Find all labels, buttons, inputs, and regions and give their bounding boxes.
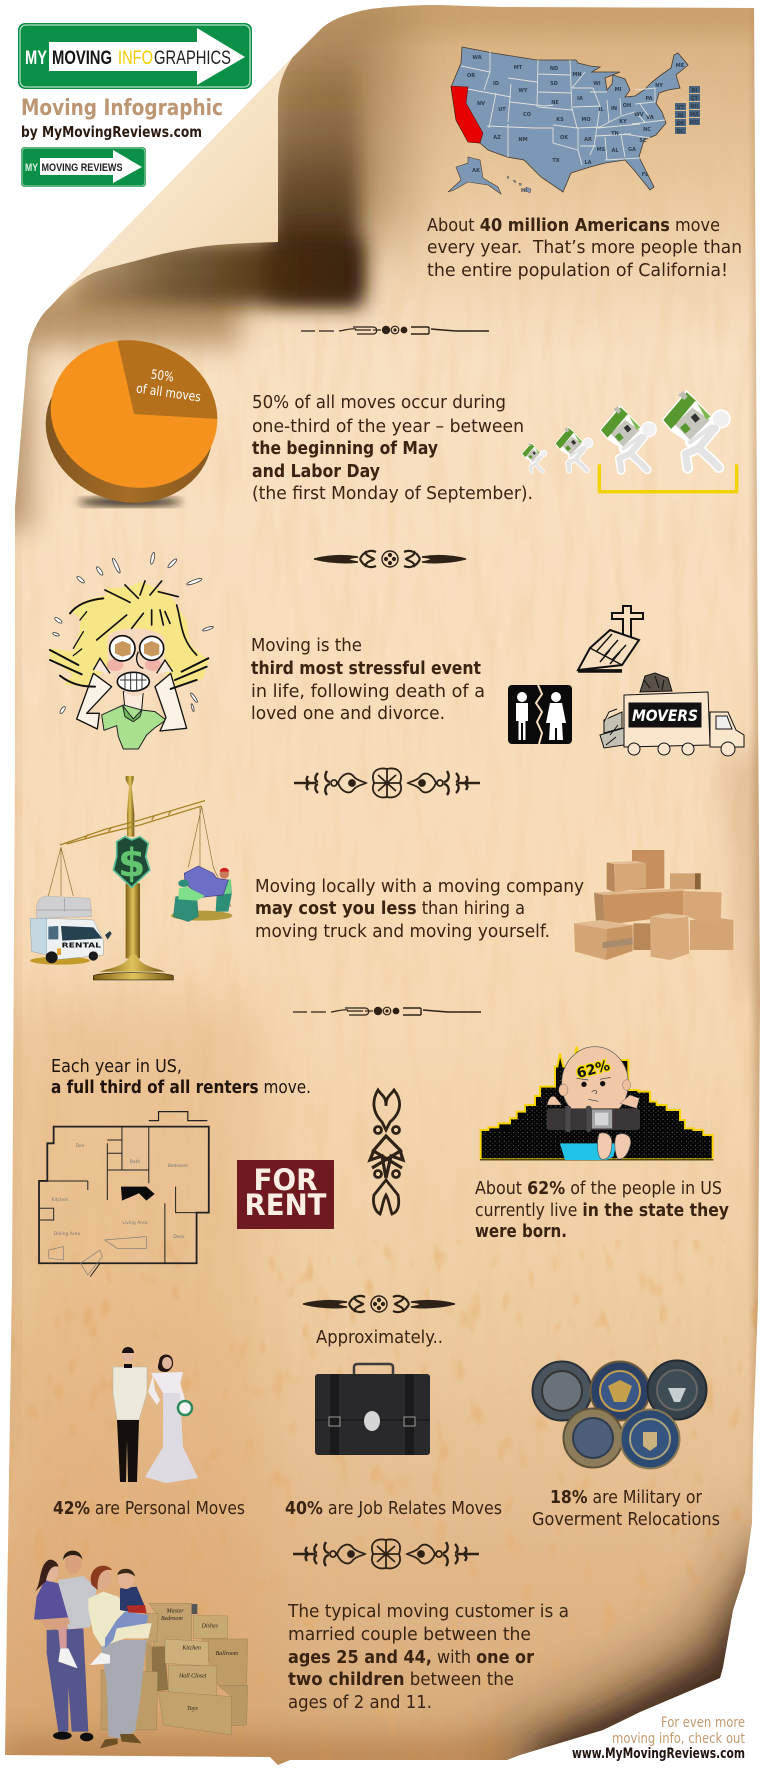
state labels: ME [676, 63, 685, 69]
state labels: AK [472, 168, 481, 174]
illustration: cardboard boxes [574, 850, 733, 960]
illustration: military seals [532, 1360, 706, 1468]
text: moving locally: moving truck and moving yourself. [255, 921, 550, 942]
state labels: VT [677, 105, 685, 111]
text: 50% of all moves: 50% of all moves occur during [252, 392, 506, 413]
sign: for rent: FOR [254, 1163, 318, 1197]
state labels: NE [551, 100, 559, 106]
yellow bracket [599, 464, 737, 492]
state labels: NV [477, 101, 485, 107]
boy [105, 1612, 148, 1648]
byline: by MyMovingReviews.com [21, 123, 202, 141]
text: renters: a full third of all renters move. [51, 1077, 311, 1098]
text: typical moving customer [287, 1601, 569, 1713]
text: 50% of all moves: (the first Monday of September). [252, 483, 533, 504]
state labels: SC [639, 138, 647, 144]
Hawaii [507, 176, 531, 193]
state labels: KS [556, 117, 564, 123]
text: 50% of all moves: and Labor Day [252, 461, 380, 482]
rental truck [30, 957, 90, 965]
text: 50% of all moves: the beginning of May [252, 438, 438, 459]
text: third most stressful event: Moving is the [251, 635, 362, 656]
dollar badge [113, 837, 150, 887]
illustration: baby in seat belt with city skyline [480, 1047, 713, 1160]
text: 50% of all moves: one-third of the year – between [252, 416, 524, 437]
boxes: Kitchen [181, 1645, 201, 1651]
man [47, 1628, 88, 1732]
state labels: MI [615, 87, 622, 93]
icon: movers truck: MOVERS [632, 706, 698, 725]
state labels: VA [646, 115, 654, 121]
state labels: IL [598, 107, 604, 113]
illustration: balance scale [30, 776, 232, 980]
chart: 3D pie 50% of all moves [46, 340, 218, 508]
logo: My Moving Infographics sign: MY [25, 48, 47, 69]
logo: My Moving Infographics sign [18, 23, 252, 89]
state labels: MN [572, 72, 582, 78]
Alaska [448, 157, 501, 194]
state labels: DE [677, 121, 685, 127]
state labels: AL [611, 148, 619, 154]
boxes [101, 1603, 248, 1735]
icon: movers truck [600, 673, 744, 756]
state labels: UT [498, 107, 506, 113]
logo: My Moving Infographics sign: GRAPHICS [154, 48, 231, 69]
state labels: WA [472, 55, 482, 61]
62% label: 62% [575, 1058, 612, 1082]
text: typical moving customer: married couple between the [288, 1624, 531, 1645]
state labels: NM [518, 137, 528, 143]
state labels: MA [690, 112, 699, 118]
state labels: OK [560, 135, 569, 141]
text: live in state born [475, 1178, 729, 1242]
state labels: NJ [677, 113, 684, 119]
boxes: Ballroom [216, 1651, 239, 1657]
room labels: Living Area [122, 1220, 148, 1226]
text: third most stressful event: in life, following death of a [251, 681, 485, 702]
text: renters: Each year in US, [51, 1056, 182, 1077]
text: 40 million Americans: the entire population of California! [427, 260, 728, 281]
text: moving locally [255, 876, 584, 942]
state labels: HI [521, 188, 527, 194]
text: live in state born: About 62% of the people in US [475, 1178, 722, 1199]
state labels: AR [584, 137, 592, 143]
pie label: 50% [150, 368, 175, 386]
state labels: WY [518, 88, 528, 94]
sign: for rent [237, 1160, 334, 1229]
illustration: family with moving boxes [34, 1551, 248, 1748]
text: third most stressful event: third most stressful event [251, 658, 481, 679]
text: footer call to action: For even more [661, 1715, 745, 1731]
text: move type percentages: Goverment Relocations [532, 1509, 720, 1530]
boxes: Hall Closet [178, 1673, 207, 1679]
state labels: MS [597, 147, 606, 153]
illustration: balance scale: RENTAL [62, 942, 102, 950]
state labels: CO [523, 112, 531, 118]
state labels: WV [634, 112, 644, 118]
text: move type percentages: 40% are Job Relates Moves [285, 1498, 502, 1519]
illustration: wedding couple [113, 1347, 198, 1483]
state labels: LA [584, 160, 592, 166]
map: USA with California highlighted [448, 47, 700, 194]
room labels: Deck [173, 1234, 185, 1240]
illustration: floor plan [39, 1112, 209, 1277]
boxes: Bedroom [161, 1616, 183, 1622]
state labels: WI [593, 81, 601, 87]
curl flap [63, 57, 293, 293]
beam [60, 801, 205, 845]
state labels: TX [552, 158, 560, 164]
state labels: MO [581, 117, 591, 123]
illustration: stressed woman [50, 552, 214, 749]
text: move type percentages: 42% are Personal Moves [53, 1498, 245, 1519]
state labels: GA [628, 147, 636, 153]
logo: My Moving Reviews sign [21, 147, 146, 187]
state labels: MT [514, 65, 523, 71]
logo: My Moving Reviews sign: MY [25, 162, 39, 174]
room labels: Bath [130, 1159, 140, 1165]
state labels: MD [690, 120, 699, 126]
icon: figures carrying houses [522, 391, 737, 492]
state labels: NY [655, 83, 663, 89]
logo: My Moving Infographics sign: MOVING [52, 48, 112, 69]
pie label: of all moves [135, 382, 202, 406]
state labels: SD [550, 81, 558, 87]
state labels: KY [619, 119, 627, 125]
state labels: RI [692, 88, 697, 94]
state labels: NC [643, 127, 651, 133]
state labels: IN [611, 106, 617, 112]
text: 40 million Americans [427, 215, 742, 281]
state labels: OH [623, 103, 631, 109]
state labels: IA [577, 96, 583, 102]
state boxes [675, 86, 700, 134]
state labels: ND [550, 66, 558, 72]
state labels: ID [493, 81, 499, 87]
text: 40 million Americans: About 40 million Americans move [427, 215, 720, 236]
heading: Moving Infographic: Moving Infographic [21, 96, 223, 121]
couch [37, 896, 92, 918]
text: 40 million Americans: every year. That’s more people than [427, 237, 742, 258]
room labels: Kitchen [52, 1197, 69, 1203]
text: footer call to action [572, 1715, 745, 1762]
text: typical moving customer: ages of 2 and 11. [288, 1692, 432, 1713]
state labels: NH [690, 104, 699, 110]
curl shadow [270, 0, 400, 240]
text: third most stressful event: loved one and divorce. [251, 703, 445, 724]
text: typical moving customer: ages 25 and 44, with one or [288, 1647, 534, 1668]
state labels: PA [645, 96, 653, 102]
text: typical moving customer: two children between the [288, 1669, 514, 1690]
room labels: Den [75, 1143, 85, 1149]
state labels: OR [467, 73, 475, 79]
girl [42, 1616, 67, 1648]
text: move type percentages [53, 1487, 720, 1530]
text: live in state born: were born. [475, 1221, 567, 1242]
text: live in state born: currently live in the state they [475, 1200, 729, 1221]
logo: My Moving Infographics sign: INFO [118, 48, 153, 69]
logo: My Moving Reviews sign: MOVING REVIEWS [42, 162, 122, 174]
room labels [52, 1143, 188, 1240]
room labels: Bedroom [168, 1163, 188, 1169]
pie label [135, 368, 202, 406]
text: renters [51, 1056, 311, 1098]
room labels: Dining Area [54, 1231, 80, 1237]
text: move type percentages: 18% are Military or [550, 1487, 703, 1508]
illustration: briefcase [315, 1364, 430, 1455]
icon: divorce sign [508, 685, 572, 744]
state labels: CT [691, 96, 699, 102]
boxes: Master [166, 1609, 184, 1615]
state labels: DC [677, 129, 685, 135]
text: approximately: Approximately.. [316, 1327, 443, 1348]
pole [126, 776, 134, 837]
text: typical moving customer: The typical moving customer is a [287, 1601, 569, 1622]
boxes: Toys [187, 1706, 198, 1712]
sign: for rent: RENT [244, 1188, 327, 1222]
boxes: Dishes [201, 1624, 219, 1630]
text: 50% of all moves [252, 392, 533, 504]
state labels [467, 55, 699, 194]
movers with chair [171, 911, 232, 921]
woman [100, 1640, 147, 1738]
ornament: vertical floral [370, 1090, 403, 1214]
state labels: TN [611, 131, 619, 137]
state labels: AZ [493, 135, 501, 141]
California [451, 86, 483, 143]
icon: gravestone [578, 606, 643, 671]
state labels: FL [642, 172, 649, 178]
text: third most stressful event [251, 635, 485, 724]
text: moving locally: Moving locally with a moving company [255, 876, 584, 897]
text: moving locally: may cost you less than hiring a [255, 898, 525, 919]
illustration: balance scale: $ [118, 842, 145, 887]
